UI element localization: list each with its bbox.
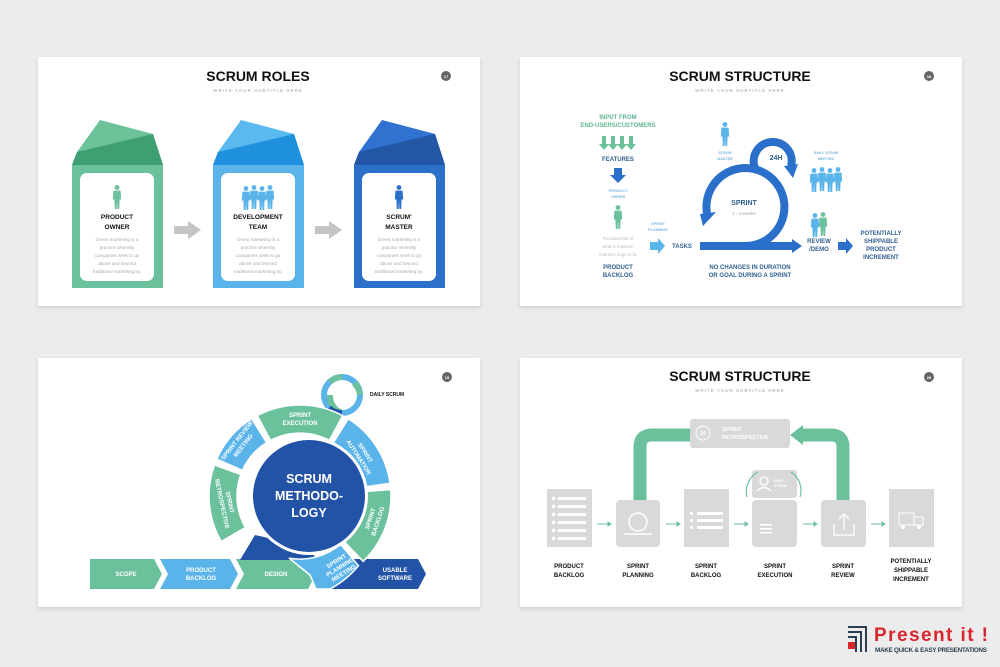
review demo: REVIEW <box>807 239 831 245</box>
sprint loop <box>700 142 792 246</box>
card: scrum master: SCRUM' <box>386 214 412 221</box>
sprint planning arrow: TASKS <box>672 244 692 250</box>
panel: scrum methodology: AUTOMATION <box>344 439 371 476</box>
input from customers: PRODUCT <box>603 265 633 271</box>
card: development team <box>213 120 304 288</box>
review demo: /DEMO <box>809 247 829 253</box>
note <box>709 265 792 279</box>
page number <box>924 372 934 382</box>
page number: 17 <box>444 74 449 79</box>
card: product owner: PRODUCT <box>101 214 133 221</box>
daily scrum ring <box>324 377 404 413</box>
cycle segments <box>209 405 391 589</box>
logo <box>848 625 988 654</box>
card: scrum master: Green marketing is a <box>378 237 421 242</box>
input from customers: Prioritized list of <box>603 236 634 241</box>
scrum master <box>717 122 733 161</box>
sprint planning arrow: PLANNING <box>648 228 668 232</box>
bottom process bar: DESIGN <box>264 572 288 578</box>
input from customers: what is required: <box>602 244 634 249</box>
scrum master: SCRUM <box>718 151 732 155</box>
labels: BACKLOG <box>554 573 584 579</box>
panel: scrum methodology: BACKLOG <box>371 506 386 537</box>
stem <box>240 535 320 560</box>
daily scrum box: DAILY <box>774 479 785 483</box>
card: product owner: companies seek to go <box>95 253 140 258</box>
card: product owner: Green marketing is a <box>96 237 139 242</box>
increment <box>860 231 902 261</box>
panel: scrum methodology <box>38 358 480 607</box>
daily scrum meeting: DAILY SCRUM <box>814 151 838 155</box>
page number: 19 <box>445 375 450 380</box>
input from customers: PRODUCT <box>609 189 628 193</box>
card: development team: TEAM <box>249 224 267 231</box>
bottom process bar <box>90 559 426 589</box>
panel: scrum structure (sprint) <box>520 57 962 306</box>
panel: scrum methodology: SPRINT REVIEW <box>221 420 255 462</box>
panel: scrum methodology: SPRINT <box>289 413 311 419</box>
panel: scrum methodology: EXECUTION <box>282 421 318 427</box>
subtitle: WRITE YOUR SUBTITLE HERE <box>213 88 303 93</box>
card: scrum master: practice whereby <box>382 245 417 250</box>
increment: POTENTIALLY <box>860 231 902 237</box>
center circle <box>250 437 368 555</box>
card: product owner: practice whereby <box>100 245 135 250</box>
input from customers: FEATURES <box>602 157 634 163</box>
bottom process bar: SOFTWARE <box>378 576 412 582</box>
increment box <box>889 489 934 547</box>
page number: 18 <box>927 74 932 79</box>
daily scrum ring: DAILY SCRUM <box>370 392 404 398</box>
arrow 1 <box>174 221 201 239</box>
panel: scrum methodology: SPRINT <box>365 507 378 530</box>
retrospective box: RETROSPECTIVE <box>722 435 769 441</box>
center circle: METHODO- <box>275 489 343 503</box>
panel: scrum methodology: SPRINT <box>356 443 373 465</box>
card: product owner: above and beyond <box>98 261 136 266</box>
retrospective box: 24 <box>700 431 706 437</box>
retrospective box <box>690 419 790 448</box>
page number: 20 <box>927 375 932 380</box>
bottom process bar: PRODUCT <box>186 568 216 574</box>
page number <box>924 71 934 81</box>
card: development team: Green marketing is a <box>237 237 280 242</box>
labels: SPRINT <box>832 564 854 570</box>
title: SCRUM STRUCTURE <box>669 68 811 84</box>
panel: scrum methodology: MEETING <box>331 564 358 584</box>
card: scrum master: companies seek to go <box>377 253 422 258</box>
green feedback loop <box>640 435 843 505</box>
panel: scrum structure (sprint): 1 - 4 weeks <box>732 211 756 216</box>
input from customers: features, bugs to fix <box>599 252 638 257</box>
panel: scrum methodology: SPRINT <box>326 553 348 570</box>
card: product owner: OWNER <box>105 224 130 231</box>
center circle: SCRUM <box>286 472 332 486</box>
panel: scrum methodology: PLANNING <box>326 557 356 579</box>
panel: scrum roles <box>38 57 480 306</box>
labels: PLANNING <box>622 573 654 579</box>
product backlog box <box>547 489 592 547</box>
review demo <box>807 212 831 253</box>
sprint backlog box <box>684 489 729 547</box>
small arrows <box>597 522 885 526</box>
execution box <box>752 500 797 547</box>
bottom process bar: SCOPE <box>115 572 137 578</box>
planning box <box>616 500 660 547</box>
input from customers: INPUT FROM <box>599 115 637 121</box>
title: SCRUM STRUCTURE <box>669 368 811 384</box>
daily scrum meeting: MEETING <box>818 157 834 161</box>
labels: POTENTIALLY <box>890 559 932 565</box>
panel: scrum methodology: RETROSPECTIVE <box>213 479 229 529</box>
review box <box>821 500 866 547</box>
card: scrum master: above and beyond <box>380 261 418 266</box>
panel: scrum structure (sprint): 24H <box>770 155 782 162</box>
card: scrum master <box>354 120 445 288</box>
daily scrum meeting <box>810 151 842 192</box>
increment: SHIPPABLE <box>864 239 898 245</box>
title: scrum roles: SCRUM ROLES <box>206 68 310 84</box>
subtitle: WRITE YOUR SUBTITLE HERE <box>695 388 785 393</box>
labels: INCREMENT <box>893 577 929 583</box>
increment: PRODUCT <box>866 247 896 253</box>
panel: scrum methodology: MEETING <box>233 433 255 459</box>
labels: BACKLOG <box>691 573 721 579</box>
input from customers: END-USERS/CUSTOMERS <box>580 123 656 129</box>
panel: scrum structure (flow) <box>520 358 962 607</box>
subtitle: WRITE YOUR SUBTITLE HERE <box>695 88 785 93</box>
card: development team: traditional marketing by. <box>234 269 282 274</box>
retrospective box: SPRINT <box>722 427 743 433</box>
scrum master: MASTER <box>717 157 733 161</box>
labels: SPRINT <box>627 564 649 570</box>
input from customers: OWNER <box>611 195 626 199</box>
sprint planning arrow: SPRINT <box>651 222 666 226</box>
labels: SPRINT <box>764 564 786 570</box>
panel: scrum structure (sprint): SPRINT <box>731 200 758 207</box>
daily scrum box <box>752 470 797 498</box>
labels: PRODUCT <box>554 564 584 570</box>
labels: EXECUTION <box>757 573 793 579</box>
card: development team: companies seek to go <box>236 253 281 258</box>
card: product owner <box>72 120 163 288</box>
panel: scrum methodology: SPRINT <box>224 491 234 514</box>
logo: MAKE QUICK & EASY PRESENTATIONS <box>875 647 987 654</box>
sprint planning arrow <box>648 222 692 254</box>
card: development team: above and beyond <box>239 261 277 266</box>
labels: SHIPPABLE <box>894 568 928 574</box>
bottom process bar: BACKLOG <box>186 576 216 582</box>
logo: Present it ! <box>874 625 988 646</box>
arrow 2 <box>315 221 342 239</box>
bottom process bar: USABLE <box>383 568 407 574</box>
card: development team: DEVELOPMENT <box>233 214 283 221</box>
card: product owner: traditional marketing by. <box>93 269 141 274</box>
labels <box>554 559 932 583</box>
input from customers: BACKLOG <box>603 273 633 279</box>
card: scrum master: MASTER <box>385 224 413 231</box>
daily scrum box: SCRUM <box>774 484 787 488</box>
page number <box>441 71 451 81</box>
labels: REVIEW <box>831 573 855 579</box>
increment: INCREMENT <box>863 255 899 261</box>
note: OR GOAL DURING A SPRINT <box>709 273 792 279</box>
page number <box>442 372 452 382</box>
center circle: LOGY <box>291 506 327 520</box>
input from customers <box>580 115 656 279</box>
note: NO CHANGES IN DURATION <box>709 265 791 271</box>
labels: SPRINT <box>695 564 717 570</box>
card: scrum master: traditional marketing by. <box>375 269 423 274</box>
card: development team: practice whereby <box>241 245 276 250</box>
